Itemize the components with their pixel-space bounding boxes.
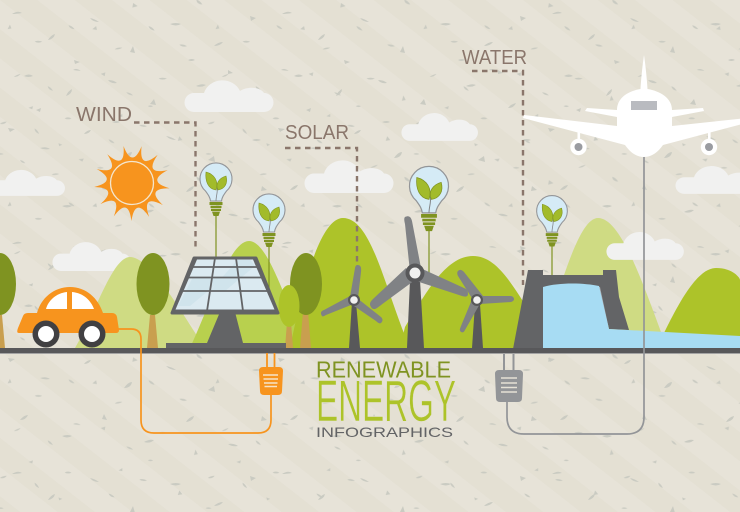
tree: small light green	[278, 285, 300, 348]
tree: far left	[0, 253, 16, 348]
bulb 1	[200, 163, 232, 216]
grey cable	[507, 155, 644, 434]
bulb 2	[253, 194, 285, 247]
cloud: far right	[675, 166, 740, 194]
title line: renewable: RENEWABLE	[316, 356, 451, 382]
tree: beside solar panel	[290, 253, 322, 348]
label: wind: WIND	[76, 103, 132, 126]
hills	[75, 218, 740, 348]
car	[17, 287, 119, 348]
wind turbine: right	[457, 270, 514, 348]
icon: grey plug	[495, 354, 523, 402]
label: water: WATER	[462, 46, 527, 69]
title	[316, 356, 456, 440]
wind turbine: left	[321, 265, 382, 348]
dashed leader: solar	[285, 148, 357, 282]
bulb 3	[409, 166, 449, 231]
airplane	[523, 55, 740, 157]
title line: energy: ENERGY	[316, 369, 456, 434]
icon: sun	[94, 146, 170, 221]
title line: infographics: INFOGRAPHICS	[316, 424, 453, 440]
dashed leader: wind	[134, 122, 196, 251]
icon: orange plug	[259, 353, 283, 395]
label: solar: SOLAR	[285, 121, 349, 144]
cloud: near dam	[606, 232, 684, 260]
tree: by car	[136, 253, 170, 348]
cloud: far left	[0, 170, 65, 196]
bulb stems	[216, 215, 552, 292]
orange cable	[118, 329, 271, 433]
cloud: top left	[185, 80, 273, 112]
ground line	[0, 348, 740, 354]
bulb 4	[537, 196, 567, 247]
cloud: above car	[52, 242, 131, 271]
solar panel	[166, 258, 286, 349]
cloud: solar	[305, 160, 393, 193]
hydro dam	[513, 270, 740, 349]
cloud: top middle	[401, 113, 478, 141]
wind turbine: centre	[370, 216, 468, 348]
dashed leader: water	[472, 71, 523, 285]
